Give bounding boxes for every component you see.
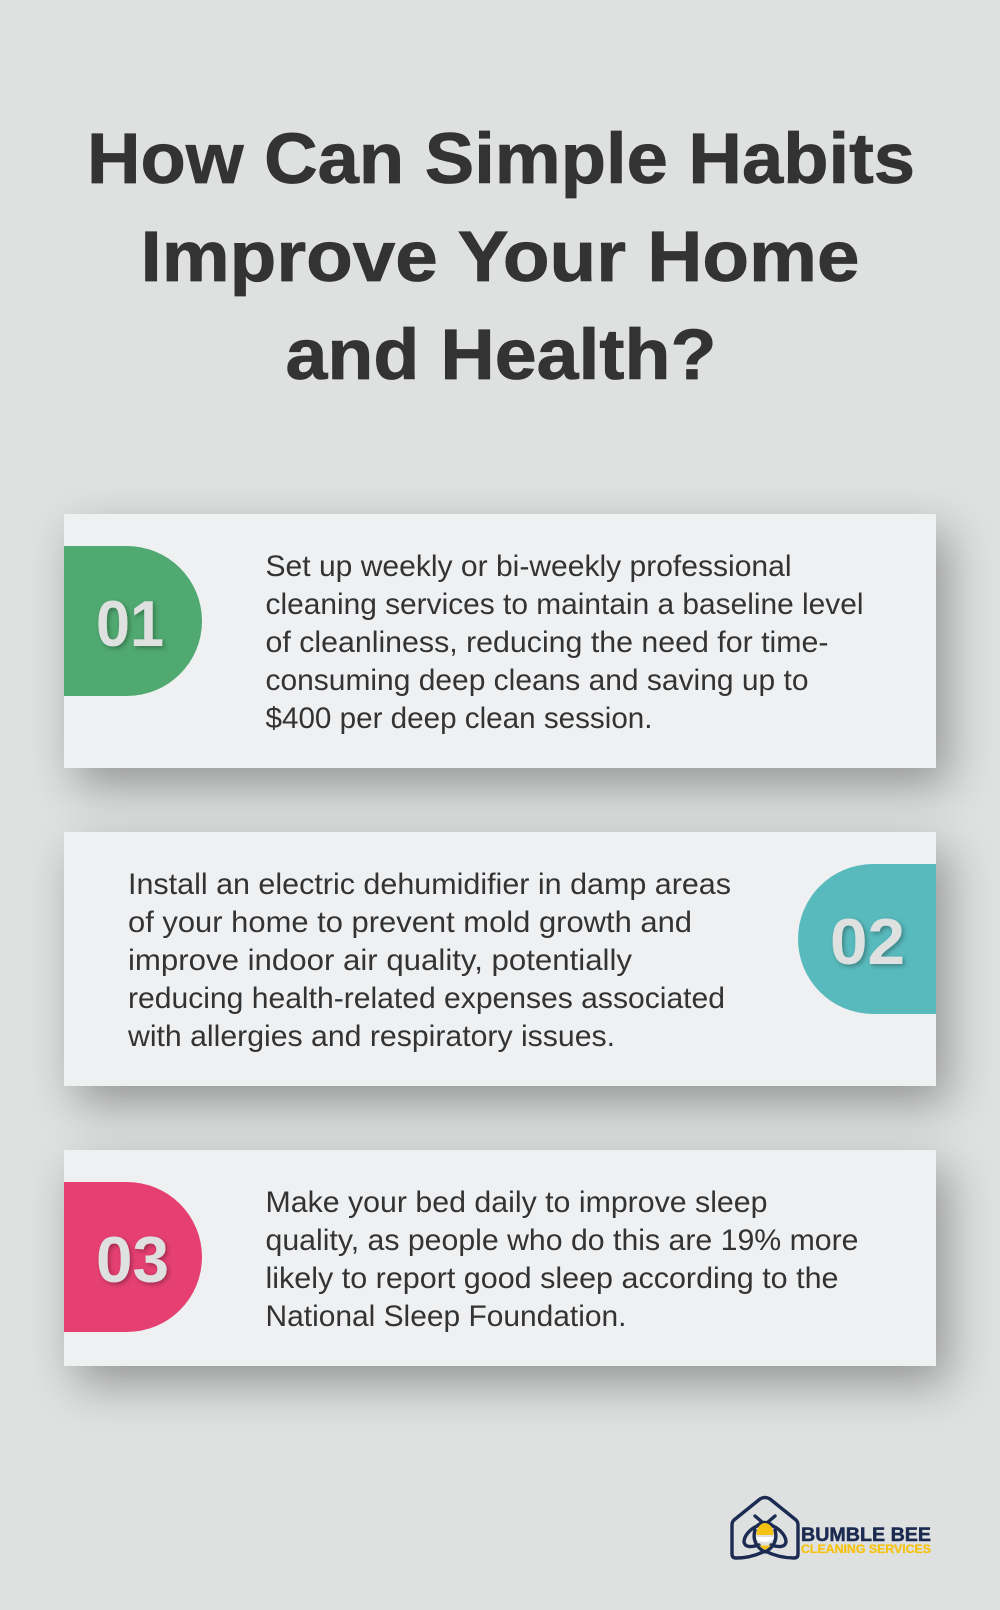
- text: step 02 description: reducing health-related expenses associated: [128, 982, 725, 1015]
- text: step 03 description: quality, as people who do this are 19% more: [266, 1224, 858, 1257]
- logo text: BUMBLE BEE: [801, 1524, 931, 1546]
- panel: step 01: [64, 514, 948, 786]
- title: How Can Simple Habits: [87, 120, 915, 199]
- badge: 01: [64, 546, 202, 696]
- panel: step 02: [64, 832, 948, 1104]
- text: step 02 description: improve indoor air quality, potentially: [128, 944, 632, 977]
- text: step 03 description: National Sleep Foundation.: [266, 1300, 626, 1333]
- text: step 01 description: of cleanliness, reducing the need for time-: [266, 626, 828, 659]
- logo: Bumble Bee Cleaning Services: [732, 1498, 931, 1558]
- text: step 03 description: Make your bed daily to improve sleep: [266, 1186, 768, 1219]
- badge: 02: 02: [830, 905, 905, 978]
- text: step 01 description: Set up weekly or bi-weekly professional: [266, 550, 792, 583]
- text: step 02 description: with allergies and respiratory issues.: [127, 1020, 615, 1053]
- badge: 03: [64, 1182, 202, 1332]
- logo text: CLEANING SERVICES: [801, 1542, 931, 1556]
- text: step 02 description: of your home to prevent mold growth and: [128, 906, 692, 939]
- text: step 01 description: cleaning services to maintain a baseline level: [266, 588, 864, 621]
- text: step 01 description: consuming deep cleans and saving up to: [266, 664, 808, 697]
- text: step 02 description: [127, 868, 731, 1053]
- icon: bee in house: [732, 1498, 798, 1558]
- badge: 01: 01: [96, 587, 164, 660]
- title: Improve Your Home: [140, 218, 860, 297]
- panel: step 03: [64, 1150, 948, 1384]
- text: step 02 description: Install an electric dehumidifier in damp areas: [128, 868, 731, 901]
- title: and Health?: [286, 316, 716, 395]
- text: step 01 description: [266, 550, 864, 735]
- text: step 01 description: $400 per deep clean session.: [266, 702, 652, 735]
- icon: bee body: [756, 1523, 774, 1550]
- badge: 02: [798, 864, 936, 1014]
- badge: 03: 03: [96, 1223, 169, 1296]
- logo text: [801, 1524, 931, 1556]
- text: step 03 description: [266, 1186, 858, 1333]
- text: step 03 description: likely to report good sleep according to the: [266, 1262, 838, 1295]
- title: [87, 120, 915, 395]
